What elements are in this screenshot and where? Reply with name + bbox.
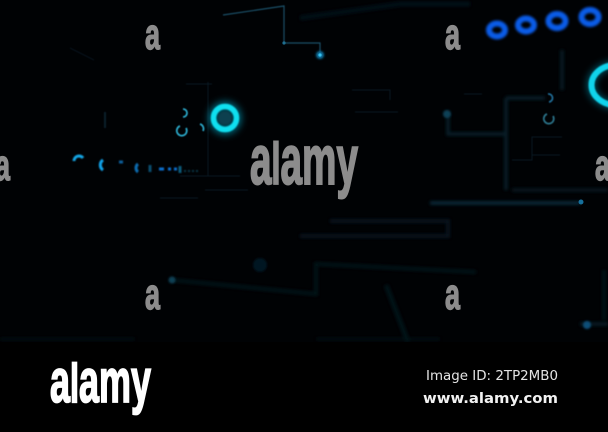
small ring fragments bbox=[177, 94, 554, 136]
row of blue ring fragments bbox=[74, 156, 200, 173]
watermark tiles: a bbox=[445, 10, 460, 59]
footer band bbox=[0, 342, 608, 432]
watermark tiles: a bbox=[445, 270, 460, 319]
watermark tiles: a bbox=[145, 10, 160, 59]
watermark tiles: a bbox=[145, 270, 160, 319]
bright trace with node bbox=[168, 6, 591, 329]
image id: Image ID: 2TP2MB0 bbox=[426, 369, 558, 384]
watermark tiles bbox=[0, 10, 608, 319]
central watermark logo: alamy bbox=[250, 121, 358, 199]
large cyan ring bbox=[213, 106, 237, 130]
top-right blue rings bbox=[489, 10, 598, 36]
large cropped cyan ring bbox=[591, 65, 608, 105]
circuit traces: fine bbox=[70, 48, 562, 198]
footer logo: alamy bbox=[50, 347, 151, 415]
circuit traces: dim bbox=[0, 4, 608, 342]
website url: www.alamy.com bbox=[423, 391, 558, 407]
